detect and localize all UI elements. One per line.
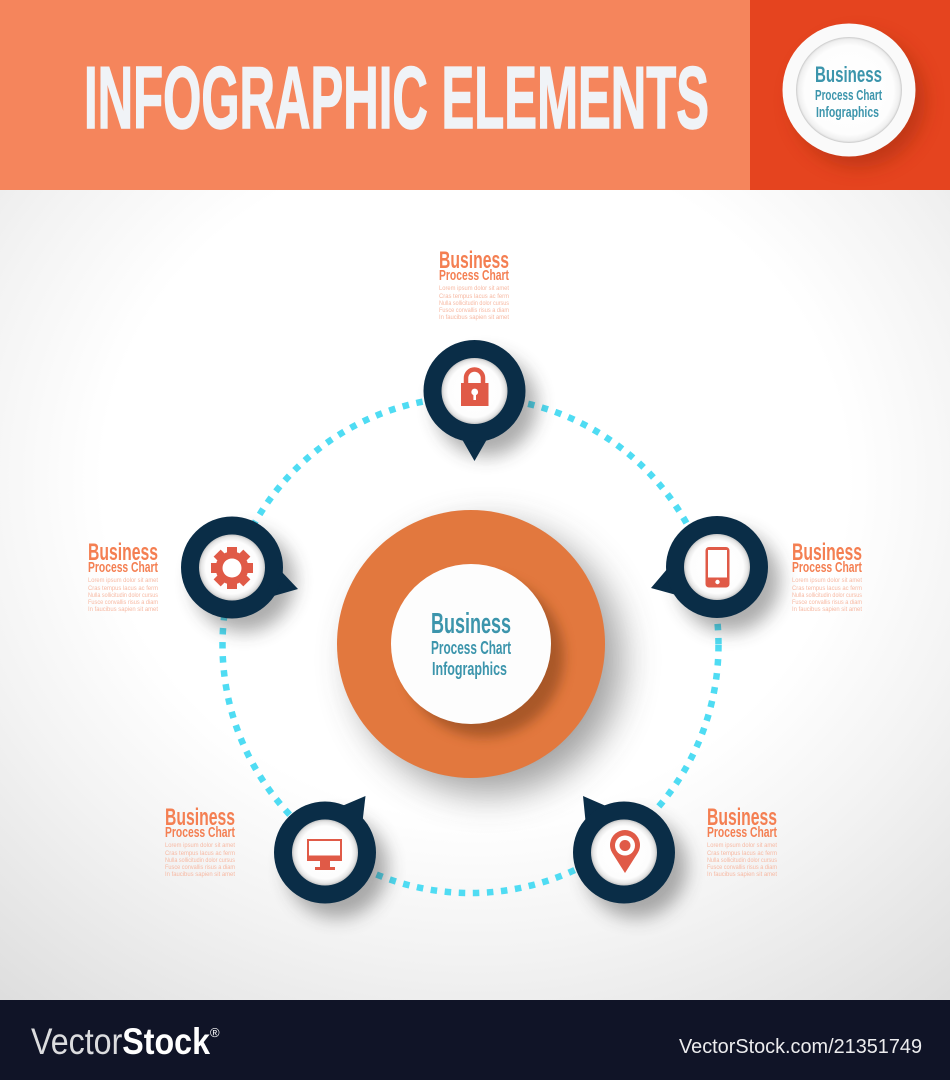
text block: left [88,539,159,613]
header badge: Infographics [816,105,879,121]
text block: top: In faucibus sapien sit amet [439,314,509,321]
text block: bottom right [707,804,778,878]
text block: right: Business [792,539,862,566]
central text: Infographics [432,658,507,679]
header badge [782,24,925,167]
text block: bottom left: Fusce convallis risus a diam [165,864,235,871]
footer url: VectorStock.com/21351749 [679,1035,922,1058]
text block: bottom right: In faucibus sapien sit amet [707,871,777,878]
text block: bottom right: Nulla sollicitudin dolor cursus [707,857,778,864]
text block: right: Cras tempus lacus ac ferm [792,585,862,592]
text block: bottom right: Process Chart [707,825,777,841]
header banner [0,0,950,190]
dashed ring [222,397,718,893]
node: right phone [651,516,780,632]
text block: top [439,247,510,321]
text block: bottom right: Cras tempus lacus ac ferm [707,850,777,857]
icon: map pin [610,830,640,873]
text block: bottom left: Business [165,804,235,831]
page background [0,190,950,1000]
footer bar [0,1000,950,1080]
text block: bottom left: Cras tempus lacus ac ferm [165,850,235,857]
text block: bottom right: Lorem ipsum dolor sit amet [707,842,777,849]
text block: right [792,539,863,613]
text block: bottom right: Fusce convallis risus a diam [707,864,777,871]
text block: bottom right: Business [707,804,777,831]
node: bottom-left monitor [274,796,388,918]
text block: top: Cras tempus lacus ac ferm [439,293,509,300]
header badge: Business [815,62,882,87]
central text [431,608,511,679]
node: left gear [181,516,298,632]
text block: top: Business [439,247,509,274]
text block: top: Lorem ipsum dolor sit amet [439,285,509,292]
footer registered mark: ® [210,1025,220,1040]
icon: monitor [307,839,342,870]
text block: bottom left: Lorem ipsum dolor sit amet [165,842,235,849]
text block: top: Fusce convallis risus a diam [439,307,509,314]
text block: left: Process Chart [88,560,158,576]
central circle [337,510,622,794]
icon: gear [211,547,253,589]
icon: phone [706,547,730,588]
text block: right: Lorem ipsum dolor sit amet [792,577,862,584]
text block: right: Fusce convallis risus a diam [792,599,862,606]
text block: top: Process Chart [439,268,509,284]
text block: bottom left [165,804,236,878]
text block: top: Nulla sollicitudin dolor cursus [439,300,510,307]
text block: right: In faucibus sapien sit amet [792,606,862,613]
text block: left: Lorem ipsum dolor sit amet [88,577,158,584]
text block: left: Business [88,539,158,566]
text block: right: Nulla sollicitudin dolor cursus [792,592,863,599]
central text: Process Chart [431,637,511,658]
text block: right: Process Chart [792,560,862,576]
central text: Business [431,608,511,640]
text block: left: Fusce convallis risus a diam [88,599,158,606]
text block: bottom left: In faucibus sapien sit amet [165,871,235,878]
text block: bottom left: Process Chart [165,825,235,841]
header badge: Process Chart [815,88,882,104]
footer logo: VectorStock [31,1021,210,1062]
text block: bottom left: Nulla sollicitudin dolor cursus [165,857,236,864]
text block: left: Cras tempus lacus ac ferm [88,585,158,592]
text block: left: Nulla sollicitudin dolor cursus [88,592,159,599]
text block: left: In faucibus sapien sit amet [88,606,158,613]
node: top lock [424,340,537,461]
icon: lock [461,370,488,406]
node: bottom-right pin [573,796,687,918]
